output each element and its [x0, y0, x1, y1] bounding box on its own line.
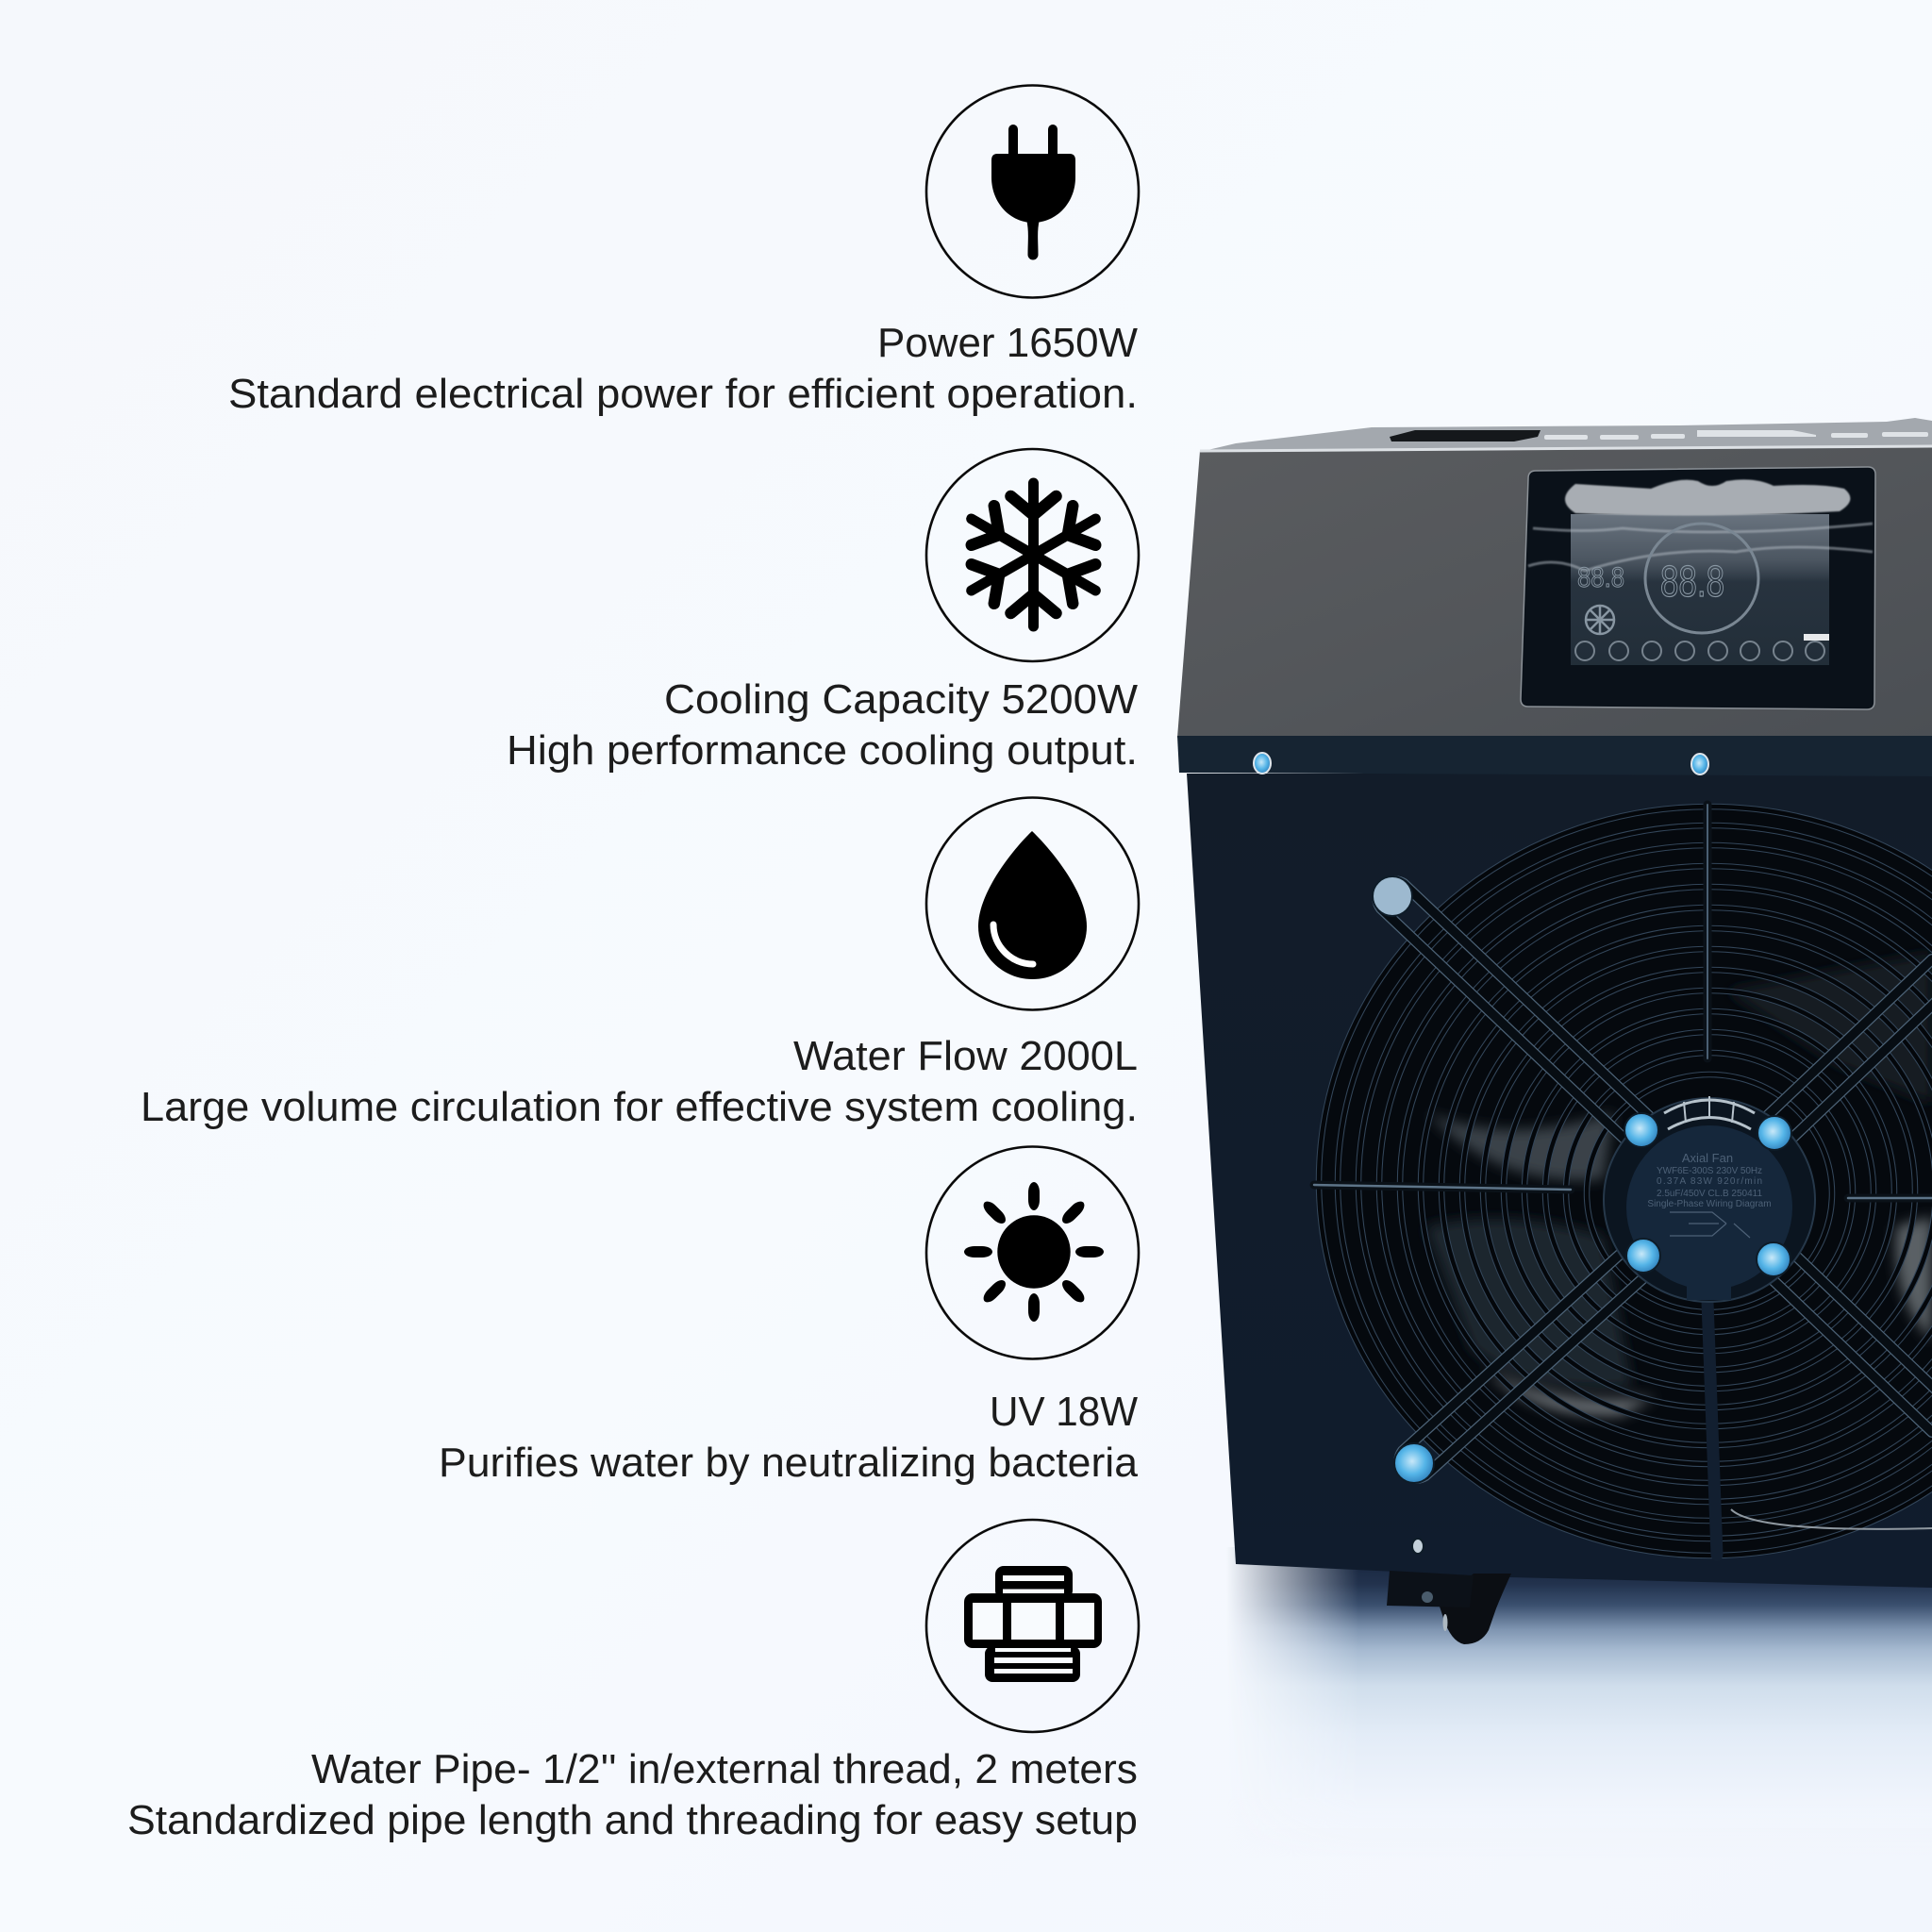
LCD dial	[1645, 524, 1758, 633]
text: cooling capacity: High performance cooling output.	[507, 727, 1138, 774]
text: uv	[439, 1389, 1139, 1486]
item: uv	[439, 1147, 1139, 1486]
text: uv: Purifies water by neutralizing bacteria	[439, 1440, 1139, 1486]
product photo: water chiller unit	[1177, 418, 1932, 1644]
text: water flow: Large volume circulation for effective system cooling.	[141, 1084, 1138, 1130]
item: power	[228, 85, 1139, 417]
double-seal label	[1804, 634, 1829, 641]
machine top surface	[1204, 418, 1932, 451]
text: water flow: Water Flow 2000L	[793, 1033, 1138, 1079]
control display panel	[1521, 467, 1875, 709]
text: cooling capacity	[507, 676, 1138, 774]
motor label: Single-Phase Wiring Diagram	[1647, 1199, 1772, 1209]
text: uv: UV 18W	[990, 1389, 1138, 1435]
icon: plug	[926, 85, 1139, 298]
fan blades	[1424, 953, 1932, 1415]
icon: sun	[926, 1147, 1139, 1358]
motor label: 2.5uF/450V CL.B 250411	[1657, 1189, 1762, 1199]
text: power: Power 1650W	[877, 320, 1138, 366]
glare wrinkles	[1528, 524, 1873, 571]
text: power: Standard electrical power for efficient operation.	[228, 371, 1138, 417]
motor label	[1647, 1151, 1772, 1209]
display glass	[1521, 467, 1875, 709]
icon: snowflake	[926, 449, 1139, 661]
text: cooling capacity: Cooling Capacity 5200W	[664, 676, 1138, 723]
LCD main reading: 88.8	[1660, 557, 1724, 606]
navy lid band	[1177, 736, 1932, 776]
text: water flow	[141, 1033, 1138, 1130]
hub wire guard	[1664, 1096, 1755, 1129]
grille spokes	[1314, 805, 1932, 1555]
item: cooling capacity	[507, 449, 1139, 774]
floor shadow under the machine	[1231, 1547, 1932, 1781]
text: water pipe: Water Pipe- 1/2'' in/external thread, 2 meters	[311, 1746, 1138, 1792]
LCD small reading: 88.8	[1577, 562, 1624, 593]
grille rings	[1319, 807, 1932, 1556]
icon: pipe fitting	[926, 1520, 1139, 1732]
item: water pipe	[127, 1520, 1139, 1843]
castor wheel	[1387, 1571, 1511, 1644]
fan assembly	[1314, 805, 1932, 1557]
text: power	[228, 320, 1138, 417]
text: water pipe	[127, 1746, 1138, 1843]
text: water pipe: Standardized pipe length and threading for easy setup	[127, 1797, 1138, 1843]
film glare	[1565, 479, 1850, 516]
LCD fan symbol	[1586, 606, 1614, 634]
grey upper housing	[1177, 446, 1932, 738]
motor label: Axial Fan	[1682, 1151, 1733, 1165]
top handle latch	[1390, 430, 1541, 441]
top surface highlights	[1544, 430, 1928, 440]
housing edge highlight	[1200, 446, 1932, 451]
motor label: YWF6E-300S 230V 50Hz	[1657, 1166, 1762, 1176]
touch buttons	[1575, 641, 1824, 660]
item: water flow	[141, 798, 1139, 1130]
power cable	[1731, 1509, 1932, 1529]
band screws	[1254, 753, 1708, 774]
navy lower body	[1187, 774, 1932, 1588]
fan opening	[1317, 806, 1932, 1557]
protective film	[1571, 514, 1829, 665]
wiring diagram	[1670, 1212, 1750, 1238]
motor hub	[1604, 1096, 1815, 1302]
motor label: 0.37A 83W 920r/min	[1657, 1176, 1762, 1187]
bolts	[1373, 876, 1791, 1554]
icon: water drop	[926, 798, 1139, 1009]
mounting bracket rails	[1377, 881, 1932, 1478]
